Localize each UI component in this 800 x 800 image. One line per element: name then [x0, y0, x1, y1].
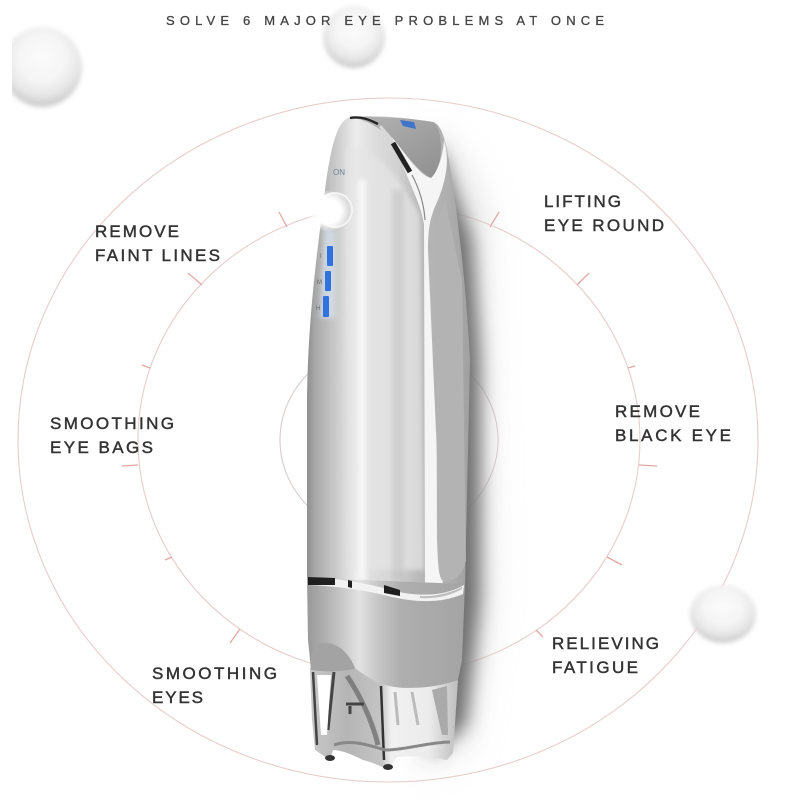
device: blue halo: [320, 228, 335, 318]
device: upper body: [307, 116, 470, 585]
label: remove black eye: BLACK EYE: [615, 426, 731, 445]
concentric rings with ticks: [18, 98, 758, 782]
device: dark grey notch: [311, 642, 355, 671]
label: smoothing eyes: SMOOTHING: [152, 664, 277, 683]
label: remove faint lines: REMOVE: [95, 222, 179, 241]
device: indicator letters: H: [316, 306, 320, 312]
device: power button ring: [318, 193, 352, 227]
device: top grey facet: [350, 117, 441, 178]
device: indicator letters: [316, 254, 322, 312]
device: white Y-shaped trim: [392, 137, 447, 590]
device: feet: [325, 755, 335, 761]
label: remove black eye: REMOVE: [615, 402, 700, 421]
device: glowing light: [307, 190, 349, 232]
device shadow: [420, 135, 492, 770]
sphere: upper left: [2, 27, 82, 107]
device: blue indicator bars: [323, 246, 333, 317]
sphere: top centre: [323, 6, 385, 68]
device: blue top mark: [400, 120, 416, 129]
title: SOLVE 6 MAJOR EYE PROBLEMS AT ONCE: [166, 13, 604, 28]
label: smoothing eye bags: EYE BAGS: [50, 438, 153, 457]
device: [307, 116, 470, 770]
label: lifting eye round: LIFTING: [544, 192, 621, 211]
device: ON label: ON: [333, 168, 345, 177]
device: right panel: [436, 200, 466, 581]
device: glass head: [310, 668, 458, 770]
label: remove faint lines: FAINT LINES: [95, 246, 220, 265]
label: smoothing eyes: EYES: [152, 688, 203, 707]
device: glass details: [313, 672, 450, 760]
device: dark chrome edge: [350, 117, 378, 124]
device: soft highlights: [358, 166, 425, 580]
sphere: lower right: [690, 585, 756, 643]
label: relieving fatigue: FATIGUE: [552, 658, 638, 677]
label: smoothing eye bags: SMOOTHING: [50, 414, 174, 433]
device: lower body: [307, 578, 465, 688]
device: indicator letters: I: [320, 254, 322, 260]
device: indicator letters: M: [317, 280, 322, 286]
label: relieving fatigue: RELIEVING: [552, 634, 659, 653]
device: chrome band: [308, 577, 464, 601]
label: lifting eye round: EYE ROUND: [544, 216, 664, 235]
